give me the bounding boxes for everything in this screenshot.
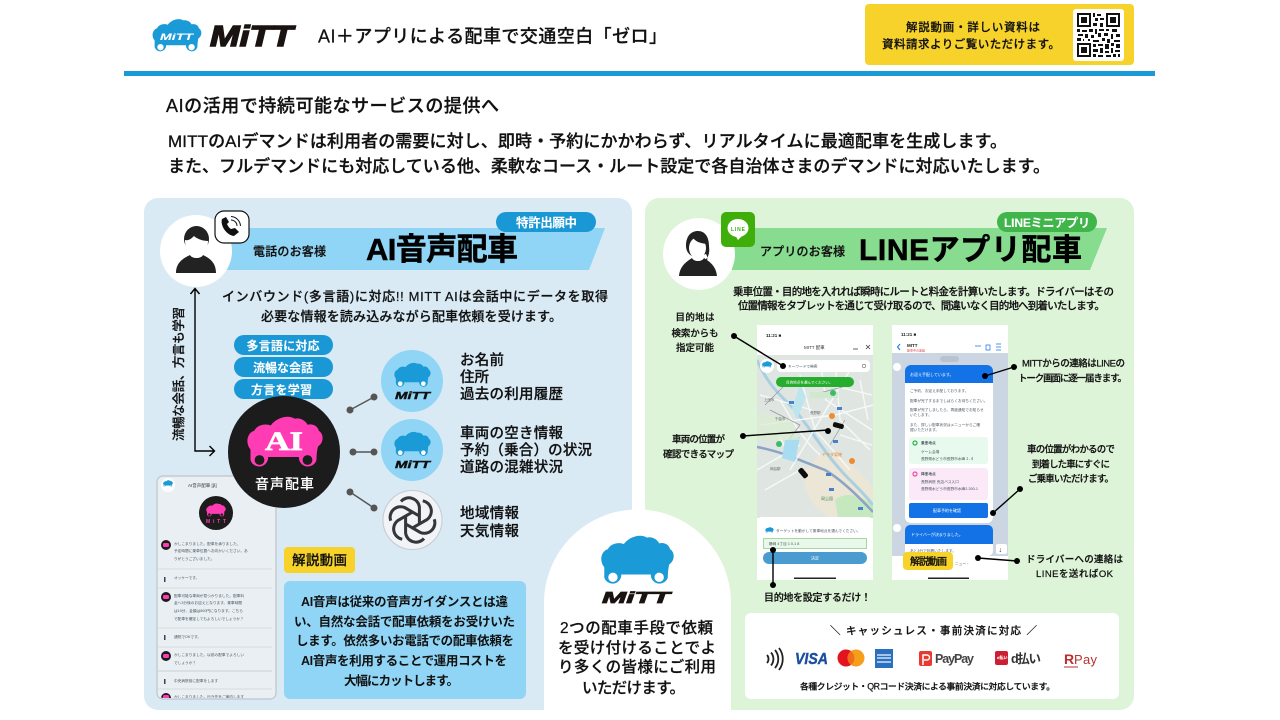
logo: d payment: d払い xyxy=(1011,651,1041,666)
bottom card: 静岡 4丁目 1 0-1 8 xyxy=(769,541,799,546)
callout: AI voice benefit xyxy=(284,581,526,699)
chat screenshot: でしょうか？ xyxy=(174,660,196,665)
map: ヤマダ電機 xyxy=(822,451,842,457)
annotation: boarding: ご乗車いただけます。 xyxy=(1028,473,1114,485)
chat screenshot: オッケーです。 xyxy=(174,575,199,580)
data list: customer xyxy=(460,352,563,403)
phone: map screen xyxy=(757,325,873,580)
intro heading: AIの活用で持続可能なサービスの提供へ xyxy=(166,96,499,116)
annotation: map xyxy=(663,428,831,460)
connectors xyxy=(347,394,377,511)
chat screenshot: 中央病院前に配車をします xyxy=(174,678,219,683)
chat screenshot: は10分、金額は600円になります。こちら xyxy=(174,608,243,613)
feature pills: 方言を学習 xyxy=(251,382,312,397)
callout: AI voice benefit: AI音声を利用することで運用コストを xyxy=(301,653,507,668)
banner title: LINEアプリ配車 xyxy=(859,234,1082,267)
logo: MITT wordmark: MiTT xyxy=(210,21,296,53)
green hint pill: 目的地点を選んでください。 xyxy=(786,380,833,384)
annotation: search: 目的地は xyxy=(676,312,715,324)
phone: LINE chat screen: いたします。 xyxy=(910,412,932,417)
description: 乗車位置・目的地を入れれば瞬時にルートと料金を計算いたします。ドライバーはその xyxy=(733,285,1114,298)
video badge xyxy=(903,552,953,570)
QR code xyxy=(1073,9,1124,61)
annotation: boarding: 車の位置がわかるので xyxy=(1027,444,1115,456)
banner xyxy=(225,228,605,270)
chat screenshot: かしこまりました。行き先をご案内します xyxy=(174,694,244,699)
icon: OpenAI knot xyxy=(383,490,442,550)
avatar: app customer xyxy=(663,218,735,290)
icon: MITT data 2: MiTT xyxy=(395,460,431,471)
annotation: boarding: 到着した車にすぐに xyxy=(1032,458,1110,470)
chat screenshot: 金へ3分後のお迎えとなります。乗車時間 xyxy=(174,600,242,605)
yellow resource callout: 解説動画・詳しい資料は xyxy=(906,20,1040,34)
data list: area: 天気情報 xyxy=(460,523,520,540)
feature pills xyxy=(234,335,333,399)
data list: vehicle xyxy=(460,425,592,476)
video badge xyxy=(284,547,355,573)
logo: cloud icon xyxy=(153,19,201,51)
phone: LINE chat screen: 長野病院 売店バス入口 xyxy=(921,479,959,484)
patent pill xyxy=(496,212,596,232)
phone: LINE chat screen: MITT xyxy=(907,343,918,348)
description: 必要な情報を読み込みながら配車依頼を受けます。 xyxy=(261,309,562,324)
panel: LINE app dispatch xyxy=(645,198,1134,710)
phone: LINE chat screen: 長野県水どう市長野市水峰１-４ xyxy=(921,456,974,461)
phone: LINE chat screen: お迎え手配しています。 xyxy=(910,371,953,377)
data list: area: 地域情報 xyxy=(460,505,520,522)
phone: LINE chat screen: あと3分で到着いたします。 xyxy=(910,548,956,553)
annotation: destination: 目的地を設定するだけ！ xyxy=(764,591,871,604)
logo: center cloud xyxy=(601,536,674,584)
annotation: LINE notice xyxy=(982,358,1127,384)
annotation: driver contact: LINEを送ればOK xyxy=(1036,568,1114,580)
data list: vehicle: 車両の空き情報 xyxy=(460,425,564,442)
yellow resource callout xyxy=(865,4,1134,65)
logo: small cloud lettering: MiTT xyxy=(160,32,195,42)
icon: phone xyxy=(215,211,249,243)
annotation: destination xyxy=(764,547,871,604)
data list: vehicle: 予約（乗合）の状況 xyxy=(460,442,592,459)
logo: d payment: d払い xyxy=(997,654,1007,660)
data list: customer: お名前 xyxy=(460,352,504,369)
icon: MITT data 1 xyxy=(381,350,443,412)
description xyxy=(733,285,1114,312)
annotation: driver contact xyxy=(975,554,1123,580)
icon: MITT data 1: MiTT xyxy=(395,391,431,402)
phone: LINE chat screen: ゲーム会場 xyxy=(921,449,940,454)
logo: R Pay xyxy=(1064,651,1098,667)
map: 上田市 xyxy=(764,397,775,402)
logo: VISA: VISA xyxy=(795,651,828,668)
annotation: search xyxy=(672,312,786,369)
center message xyxy=(558,619,716,697)
payment note: 各種クレジット・QRコード決済による事前決済に対応しています。 xyxy=(800,680,1055,692)
header xyxy=(124,4,1155,76)
phone: LINE chat screen: 配車中の連絡 xyxy=(907,348,925,352)
annotation: map: 確認できるマップ xyxy=(663,448,734,460)
avatar: phone customer xyxy=(160,215,232,287)
yellow resource callout: 資料請求よりご覧いただけます。 xyxy=(882,37,1060,51)
logo: American Express xyxy=(875,649,893,668)
annotation: search: 指定可能 xyxy=(676,342,714,354)
map: 千曲市 xyxy=(775,416,786,421)
phone: LINE chat screen xyxy=(892,325,1008,580)
map: 岡公園 xyxy=(821,495,833,501)
panel: payment xyxy=(745,613,1119,699)
phone: LINE chat screen: 乗車地点 xyxy=(921,440,936,445)
chat screenshot: 通院でOKです。 xyxy=(174,634,201,639)
chat screenshot: かしこまりました。配車を承りました。 xyxy=(174,541,240,546)
intro text: また、フルデマンドにも対応している他、柔軟なコース・ルート設定で各自治体さまのデマンドに対応いたします。 xyxy=(168,156,1050,176)
phone: LINE chat screen: 11:21 ■ xyxy=(901,332,917,337)
logo: PayPay xyxy=(919,651,974,666)
phone: LINE chat screen: 配車が完了しましたら、再度通知でお知らせ xyxy=(910,407,984,412)
LINE mini app pill: LINEミニアプリ xyxy=(1004,216,1090,230)
vertical label: 流暢な会話、方言も学習 xyxy=(171,307,186,441)
logo: center wordmark: MiTT xyxy=(602,590,672,607)
phone: LINE chat screen: 配車予約を確認 xyxy=(933,507,961,513)
icon: LINE xyxy=(721,212,755,247)
chat screenshot: で配車を確定してもよろしいでしょうか？ xyxy=(174,616,244,621)
intro text: MITTのAIデマンドは利用者の需要に対し、即時・予約にかかわらず、リアルタイムに最適配車を生成します。 xyxy=(168,131,1007,151)
header rule xyxy=(124,71,1155,76)
header title: AI＋アプリによる配車で交通空白「ゼロ」 xyxy=(318,26,667,46)
banner title: AI音声配車 xyxy=(366,232,518,267)
search bar xyxy=(760,359,870,373)
arrow: two-way conversation xyxy=(190,288,214,456)
phone: LINE chat screen: 降車地点 xyxy=(921,471,936,476)
icon: contactless xyxy=(767,648,783,670)
AI voice badge: AI xyxy=(265,427,303,456)
patent pill: 特許出願中 xyxy=(516,215,577,230)
map: 岡谷駅 xyxy=(770,466,781,471)
logo: Mastercard xyxy=(838,650,864,666)
banner caption: 電話のお客様 xyxy=(253,244,326,258)
center message: 2つの配車手段で依頼 xyxy=(560,619,713,637)
phone: LINE chat screen: 配車が完了するまでしばらくお待ちください。 xyxy=(910,398,987,403)
chat screenshot: かしこまりました。以前の配車でよろしい xyxy=(174,652,244,657)
description: 位置情報をタブレットを通じて受け取るので、間違いなく目的地へ到着いたします。 xyxy=(738,299,1105,312)
bottom card: ターゲットを動かして乗車地点を選んでください。 xyxy=(776,528,861,533)
video badge: 解説動画 xyxy=(910,555,947,568)
callout: AI voice benefit: い、自然な会話で配車依頼をお受けいた xyxy=(294,614,515,629)
intro text xyxy=(168,131,1050,176)
data list: area xyxy=(460,505,520,540)
bottom card xyxy=(757,517,873,580)
phone: LINE chat screen: ニュー・ xyxy=(955,562,970,566)
logo: R Pay: Pay xyxy=(1074,652,1098,667)
green hint pill xyxy=(776,377,854,387)
data list: vehicle: 道路の混雑状況 xyxy=(460,459,564,476)
annotation: LINE notice: トーク画面に逐一届きます。 xyxy=(1018,374,1127,384)
center message: いただけます。 xyxy=(582,679,685,697)
banner caption: アプリのお客様 xyxy=(760,244,845,258)
center message: を受け付けることでよ xyxy=(558,638,716,657)
map xyxy=(757,355,873,518)
feature pills: 流暢な会話 xyxy=(253,360,313,375)
annotation: LINE notice: MITTからの連絡はLINEの xyxy=(1022,358,1125,370)
phone: map screen: MITT 配車 xyxy=(804,344,825,351)
AI voice badge xyxy=(228,396,340,508)
phone: LINE chat screen: ドライバーが決まりました。 xyxy=(911,531,963,537)
description xyxy=(222,289,608,324)
center arch xyxy=(544,510,731,710)
icon: MITT data 2 xyxy=(381,419,443,481)
center message: り多くの皆様にご利用 xyxy=(558,658,716,676)
AI voice badge: 音声配車 xyxy=(255,476,314,492)
data list: customer: 過去の利用履歴 xyxy=(460,386,563,403)
annotation: boarding xyxy=(990,444,1115,516)
phone: map screen: 11:21 ■ xyxy=(766,333,782,338)
payment heading: ＼ キャッシュレス・事前決済に対応 ／ xyxy=(830,624,1038,637)
phone: LINE chat screen: ご予約、お迎え手配しております。 xyxy=(910,388,968,393)
banner xyxy=(732,228,1107,270)
map: 長野駅 xyxy=(810,410,821,415)
phone: LINE chat screen: 認いただけます。 xyxy=(910,427,939,432)
phone: LINE chat screen: ↓ xyxy=(998,547,1002,554)
phone: LINE chat screen: また、詳しい配車状況はメニューからご確 xyxy=(910,422,980,427)
chat screenshot: AI音声配車 [β] xyxy=(188,482,217,489)
logo: PayPay: PayPay xyxy=(935,652,974,666)
icon: LINE: LINE xyxy=(731,227,746,233)
phone: LINE chat screen: 長野県水どう市長野市水峰2-300-1 xyxy=(921,486,978,491)
LINE mini app pill xyxy=(997,212,1097,232)
annotation: driver contact: ドライバーへの連絡は xyxy=(1026,554,1123,566)
callout: AI voice benefit: 大幅にカットします。 xyxy=(344,673,459,688)
cars xyxy=(797,422,844,479)
chat screenshot: りがとうございました。 xyxy=(174,556,215,561)
chat screenshot: 予定時間に乗車位置へお向かいください。あ xyxy=(174,548,248,553)
search bar: キーワードで検索 xyxy=(788,364,818,368)
annotation: search: 検索からも xyxy=(672,328,718,340)
description: インバウンド(多言語)に対応!! MITT AIは会話中にデータを取得 xyxy=(222,289,608,304)
bottom card: 決定 xyxy=(811,554,819,560)
feature pills: 多言語に対応 xyxy=(246,338,320,353)
chat screenshot: 配車可能な車両が見つかりました。配車料 xyxy=(174,593,244,598)
chat screenshot xyxy=(157,476,276,703)
logo: R Pay: R xyxy=(1064,651,1074,667)
callout: AI voice benefit: します。依然多いお電話での配車依頼を xyxy=(296,633,514,648)
annotation: map: 車両の位置が xyxy=(672,434,725,446)
chat screenshot: MiTT xyxy=(206,519,226,525)
callout: AI voice benefit: AI音声は従来の音声ガイダンスとは違 xyxy=(301,594,508,609)
logo: d payment xyxy=(995,651,1041,666)
data list: customer: 住所 xyxy=(460,369,490,386)
panel: AI voice dispatch xyxy=(144,198,632,710)
video badge: 解説動画 xyxy=(292,552,347,568)
